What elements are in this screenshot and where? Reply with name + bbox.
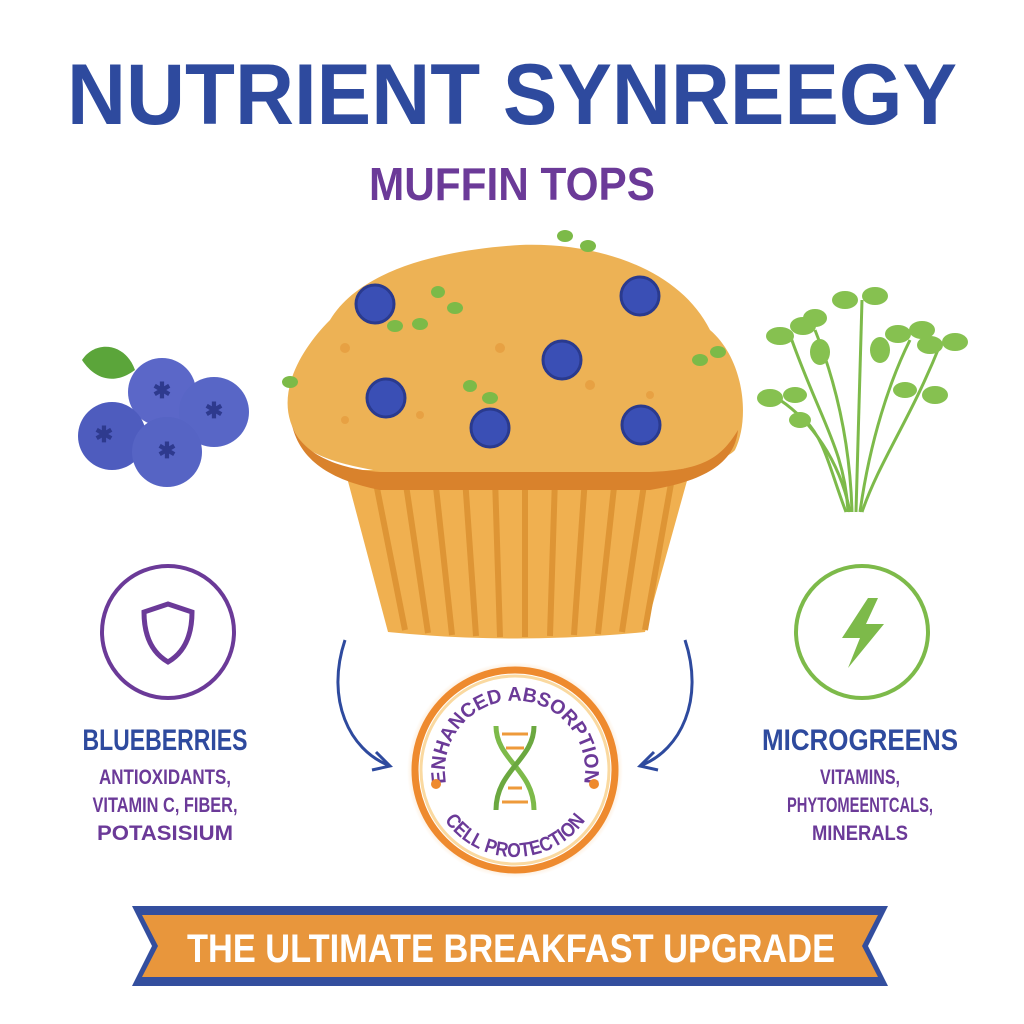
text block: blueberries [82,724,248,845]
title: NUTRIENT SYNREEGY [67,47,957,143]
icon: blueberries: ✱ [158,438,176,463]
icon: microgreens [757,287,968,512]
text block: microgreens: MINERALS [812,822,908,845]
text block: microgreens [762,724,958,845]
badge: enhanced absorption: CELL PROTECTION [447,812,585,858]
badge: enhanced absorption [408,664,622,876]
text block: microgreens: PHYTOMEENTCALS, [787,794,933,817]
text block: blueberries: POTASISIUM [97,822,233,845]
icon: lightning circle [796,566,928,698]
cup [345,470,690,638]
icon: blueberries: ✱ [153,378,171,403]
text block: blueberries: ANTIOXIDANTS, [99,766,231,789]
icon: blueberries: ✱ [95,422,113,447]
icon: shield circle [102,566,234,698]
text block: blueberries: BLUEBERRIES [82,724,248,757]
text block: microgreens: VITAMINS, [820,766,900,789]
icon: blueberries [78,347,249,487]
arrow left [338,640,390,770]
arrow right [640,640,692,770]
dome [288,245,743,481]
text block: microgreens: MICROGREENS [762,724,958,757]
icon: blueberries: ✱ [205,398,223,423]
subtitle: MUFFIN TOPS [369,158,655,210]
text block: blueberries: VITAMIN C, FIBER, [92,794,238,817]
badge: enhanced absorption: ENHANCED ABSORPTION [431,687,599,783]
icon: dna [496,726,534,810]
banner: THE ULTIMATE BREAKFAST UPGRADE [187,927,835,971]
muffin [282,230,743,638]
banner [132,906,888,986]
